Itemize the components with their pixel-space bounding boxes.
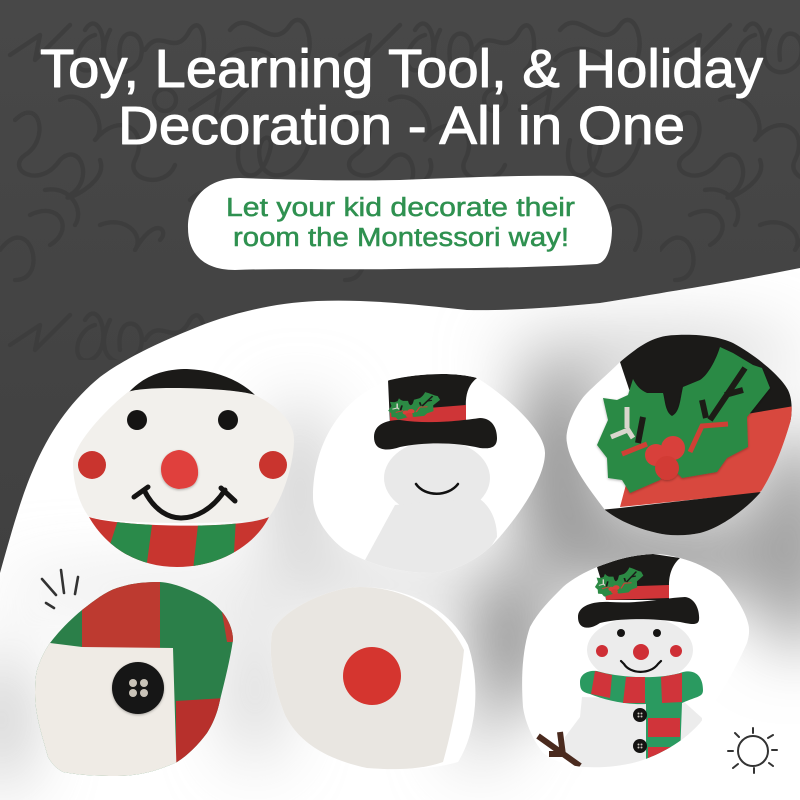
title: Decoration - All in One [118,96,685,156]
twig [538,732,580,766]
photo: back of felt piece [271,587,475,769]
hat [388,374,477,425]
doodle pattern [0,0,800,360]
photo: holly close-up [566,334,792,536]
hat arc [129,369,255,395]
subtitle pill [188,176,612,270]
small holly [595,567,643,597]
small holly [388,392,440,420]
smile [416,484,458,494]
head [587,619,693,677]
holly leaves and berries [597,347,770,493]
eyes [127,410,238,430]
red dot [343,647,401,705]
scarf [580,671,703,760]
subtitle pill: room the Montessori way! [233,224,569,252]
face paper [73,388,294,523]
photo: snowman face [73,369,294,570]
white wave panel with soft shading [0,260,800,800]
photo: snowman with hat [313,374,545,580]
title [40,39,763,156]
photo: full snowman [522,554,749,772]
cheeks [78,451,287,479]
scarf stripes [89,517,269,567]
body [563,697,702,772]
snowman body [365,440,497,580]
button [112,662,164,714]
icon: sun [728,728,777,773]
top hat [597,554,680,600]
face details [617,629,661,637]
smile [134,487,235,518]
icon: spark lines [42,570,78,608]
buttons [633,708,647,753]
subtitle pill: Let your kid decorate their [226,194,576,222]
title: Toy, Learning Tool, & Holiday [40,39,763,99]
nose [161,450,198,489]
photo: scarf and button [35,582,233,776]
